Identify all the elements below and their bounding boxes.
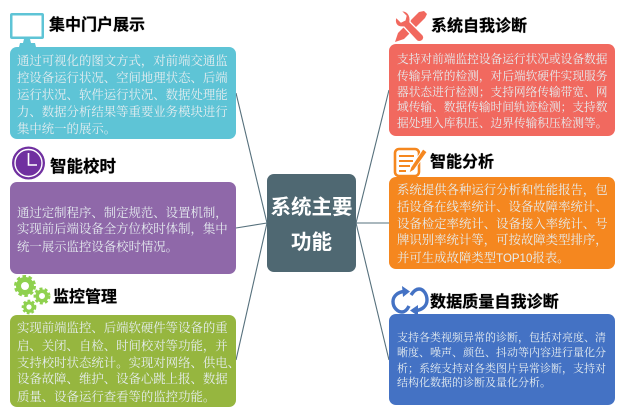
icon: clock	[12, 146, 45, 180]
panel: 数据质量自我诊断: 支持各类视频异常的诊断，包括对亮度、清	[397, 332, 606, 344]
panel: 智能校时: 统一展示监控设备校时情况。	[17, 240, 178, 254]
panel: 系统自我诊断: 据处理入库积压、边界传输积压检测等。	[397, 117, 607, 130]
panel: 智能分析: 并可生成故障类型TOP10报表。	[397, 251, 570, 265]
heading: 监控管理: 监控管理	[53, 289, 117, 306]
panel: 集中门户展示: 通过可视化的图文方式，对前端交通监	[17, 54, 228, 68]
panel: 系统自我诊断: 域传输、数据传输时间轨迹检测；支持数	[397, 101, 607, 114]
icon: wrench and pencil	[395, 11, 427, 42]
panel: 智能校时: 通过定制程序、制定规范、设置机制，	[17, 206, 228, 220]
panel: 集中门户展示: 集中统一的展示。	[17, 122, 116, 136]
panel: 监控管理	[10, 315, 236, 407]
panel: 集中门户展示: 力、数据分析结果等重要业务模块进行	[17, 105, 228, 119]
panel: 智能分析: 系统提供各种运行分析和性能报告，包	[397, 183, 608, 197]
panel: 数据质量自我诊断	[389, 314, 615, 405]
heading: 系统自我诊断: 系统自我诊断	[431, 18, 527, 35]
panel: 集中门户展示	[10, 47, 236, 139]
icon: monitor	[10, 13, 44, 47]
panel: 智能校时	[10, 182, 236, 274]
heading: 数据质量自我诊断: 数据质量自我诊断	[430, 293, 559, 311]
panel: 集中门户展示: 控设备运行状况、空间地理状态、后端	[17, 71, 228, 85]
heading: 智能分析: 智能分析	[430, 154, 494, 171]
panel: 智能分析	[389, 177, 615, 269]
panel: 监控管理: 质量、设备运行查看等的监控功能。	[17, 390, 215, 404]
center node: 系统主要功能: 系统主要	[270, 196, 352, 219]
panel: 系统自我诊断: 器状态进行检测；支持网络传输带宽、网	[397, 86, 607, 99]
panel: 智能分析: 设备检定率统计、设备接入率统计、号	[397, 217, 608, 231]
panel: 监控管理: 设备故障、维护、设备心跳上报、数据	[17, 372, 228, 386]
heading: 智能校时: 智能校时	[50, 158, 116, 176]
panel: 数据质量自我诊断: 结构化数据的诊断及量化分析。	[397, 377, 551, 389]
panel: 集中门户展示: 运行状况、软件运行状况、数据处理能	[17, 88, 228, 102]
panel: 智能分析: 牌识别率统计等，可按故障类型排序，	[397, 233, 608, 247]
center node: 系统主要功能: 功能	[291, 231, 332, 254]
panel: 监控管理: 支持校时状态统计。实现对网络、供电、	[17, 356, 240, 370]
panel: 系统自我诊断	[389, 44, 615, 136]
panel: 智能分析: 括设备在线率统计、设备故障率统计、	[397, 200, 608, 214]
heading: 集中门户展示: 集中门户展示	[49, 17, 145, 34]
icon: notepad and pen	[394, 148, 426, 177]
panel: 数据质量自我诊断: 晰度、噪声、颜色、抖动等内容进行量化分	[397, 347, 606, 359]
panel: 系统自我诊断: 传输异常的检测，对后端软硬件实现服务	[397, 70, 607, 83]
panel: 系统自我诊断: 支持对前端监控设备运行状况或设备数据	[397, 53, 607, 66]
icon: loop arrows	[391, 286, 429, 314]
panel: 监控管理: 启、关闭、自检、时间校对等功能，并	[17, 339, 228, 353]
panel: 智能校时: 实现前后端设备全方位校时体制，集中	[17, 222, 228, 236]
center node: 系统主要功能	[267, 174, 356, 272]
icon: gears	[14, 275, 50, 314]
panel: 监控管理: 实现前端监控、后端软硬件等设备的重	[17, 321, 228, 335]
panel: 数据质量自我诊断: 析；系统支持对各类图片异常诊断，支持对	[397, 363, 606, 375]
